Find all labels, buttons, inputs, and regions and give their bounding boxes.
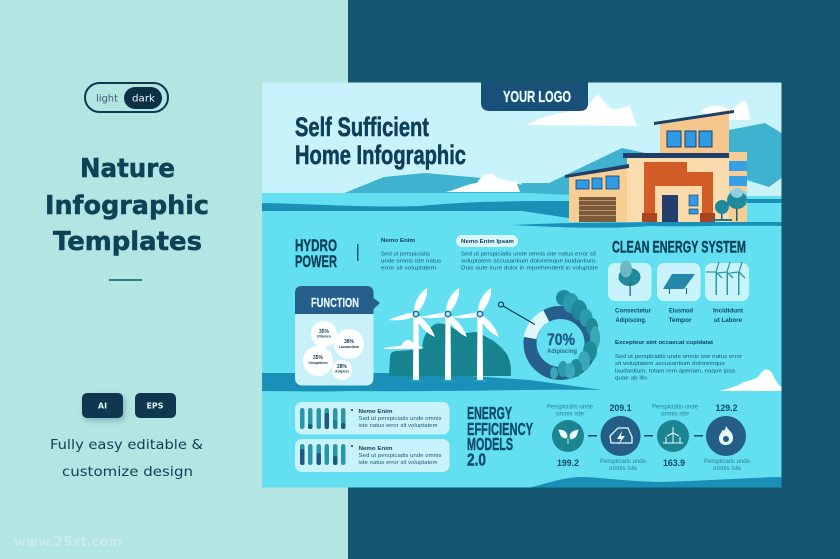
clouds bbox=[445, 94, 750, 192]
timeline labels: omnis iste bbox=[556, 412, 585, 418]
icon captions: Adipiscing. bbox=[616, 317, 647, 324]
function panel: Laudantium bbox=[339, 345, 359, 349]
donut chart: 70% bbox=[498, 290, 600, 379]
timeline values: 129.2 bbox=[716, 403, 738, 414]
donut chart: 70%: 70% bbox=[547, 330, 575, 349]
pointer bbox=[498, 302, 535, 324]
bubbles bbox=[303, 321, 364, 380]
icon: turbines bbox=[705, 262, 749, 301]
text: nemo enim: Nemo Enim bbox=[381, 238, 415, 244]
card 2: Nemo Enim bbox=[358, 446, 392, 452]
timeline labels: omnis iste bbox=[661, 412, 690, 418]
function panel: 38% bbox=[344, 339, 355, 345]
timeline labels: omnis iste bbox=[609, 466, 638, 472]
tagline bbox=[50, 437, 203, 480]
text: nemo enim ipsam: Nemo Enim Ipsam bbox=[461, 239, 514, 245]
text: nemo enim: unde omnis iste natus bbox=[381, 258, 441, 264]
function panel: Ullamco bbox=[317, 334, 332, 338]
timeline values bbox=[557, 403, 738, 469]
toggle: light dark bbox=[85, 83, 168, 112]
text: excepteur bbox=[615, 340, 742, 382]
node: turbines bbox=[657, 420, 689, 452]
heading: hydro power: HYDRO bbox=[295, 236, 337, 255]
logo tab: YOUR LOGO bbox=[503, 89, 571, 106]
tagline: customize design bbox=[62, 464, 193, 480]
left panel: promo bbox=[14, 83, 209, 550]
water band: mid bbox=[262, 373, 602, 391]
text: nemo enim bbox=[381, 238, 441, 272]
main body bbox=[627, 158, 729, 222]
function panel: Adipisci bbox=[335, 370, 349, 374]
donut chart: 70%: Adipiscing bbox=[547, 348, 577, 355]
timeline labels: Perspiciatis unde bbox=[704, 459, 751, 465]
icon: tree bbox=[608, 260, 652, 301]
clean energy system section bbox=[608, 238, 782, 391]
heading: energy efficiency models: 2.0 bbox=[467, 450, 486, 470]
text: excepteur: Excepteur sint occaecat cupidatat bbox=[615, 340, 713, 346]
timeline labels bbox=[547, 404, 751, 472]
text: excepteur: Sed ut perspiciatis unde omnis iste natus error bbox=[615, 354, 742, 360]
side balcony bbox=[725, 152, 747, 222]
trees bbox=[550, 290, 600, 379]
title bbox=[295, 112, 466, 170]
timeline labels: Perspiciatis unde bbox=[652, 404, 699, 410]
tagline: Fully easy editable & bbox=[50, 437, 203, 453]
heading: Nature Infographic Templates: Templates bbox=[53, 227, 202, 257]
upper floor bbox=[660, 110, 729, 157]
function panel: Voluptatem bbox=[308, 361, 328, 365]
card 2 bbox=[295, 439, 450, 472]
heading: energy efficiency models bbox=[467, 403, 533, 470]
card 1: iste natus error sit voluptatem bbox=[358, 423, 438, 429]
card 1: Sed ut perspiciatis unde omnis bbox=[358, 416, 442, 422]
icon captions: Consectetur bbox=[615, 308, 652, 314]
title: Home Infographic bbox=[295, 140, 466, 170]
heading: energy efficiency models: ENERGY bbox=[467, 403, 512, 423]
orange facade bbox=[644, 162, 713, 214]
function panel: 28% bbox=[337, 364, 348, 370]
toggle: light dark: light bbox=[96, 94, 118, 104]
node: flame bbox=[706, 416, 746, 456]
function panel: 35% bbox=[313, 355, 324, 361]
function panel: FUNCTION bbox=[311, 296, 359, 310]
timeline labels: omnis iste bbox=[713, 466, 742, 472]
timeline labels: Perspiciatis unde bbox=[600, 459, 647, 465]
infographic card bbox=[262, 82, 782, 488]
card 1 bbox=[295, 402, 450, 434]
icon captions: ut Labore bbox=[714, 317, 742, 324]
toggle: light dark: dark bbox=[132, 94, 155, 104]
illustration: house bbox=[512, 110, 782, 228]
icon captions bbox=[615, 308, 744, 324]
node: solar house bbox=[600, 416, 640, 456]
ground bbox=[512, 222, 782, 228]
heading: Nature Infographic Templates: Infographic bbox=[45, 191, 209, 221]
text: nemo enim: error sit voluptatem bbox=[381, 266, 436, 272]
timeline labels: Perspiciatis unde bbox=[547, 404, 594, 410]
title: Self Sufficient bbox=[295, 112, 429, 142]
node: leaf bbox=[552, 420, 584, 452]
format badges: EPS bbox=[146, 402, 164, 410]
illustration: hill and wind turbines bbox=[384, 288, 511, 382]
heading: hydro power bbox=[295, 236, 337, 271]
hydro power section bbox=[295, 235, 598, 272]
text: nemo enim ipsam: voluptatem accusantium doloremque laudantium. bbox=[461, 258, 597, 264]
heading: CLEAN ENERGY SYSTEM bbox=[612, 238, 746, 256]
heading: energy efficiency models: MODELS bbox=[467, 434, 513, 454]
text: excepteur: quae ab illo bbox=[615, 376, 647, 382]
format badges: AI bbox=[98, 402, 107, 410]
heading: Nature Infographic Templates bbox=[45, 154, 209, 257]
timeline values: 209.1 bbox=[610, 403, 632, 414]
text: nemo enim ipsam bbox=[456, 235, 598, 272]
timeline values: 163.9 bbox=[663, 458, 685, 469]
text: nemo enim: Sed ut perspiciatis bbox=[381, 252, 430, 258]
water band bbox=[262, 201, 569, 218]
hills bbox=[342, 123, 782, 196]
icon captions: Eiusmod bbox=[669, 308, 693, 314]
bottom left: stat cards bbox=[295, 402, 450, 472]
bottom wave bbox=[530, 477, 782, 488]
icon: solar panel bbox=[657, 263, 700, 301]
function panel bbox=[295, 286, 380, 386]
logo tab bbox=[481, 82, 588, 111]
sky bbox=[262, 82, 782, 196]
watermark: www.25xt.com bbox=[14, 535, 122, 550]
text: excepteur: sit voluptatem accusantium doloremque bbox=[615, 361, 725, 367]
icon captions: Incididunt bbox=[713, 308, 744, 314]
heading: energy efficiency models: EFFICIENCY bbox=[467, 419, 533, 439]
garage wing bbox=[569, 166, 627, 222]
icon captions: Tempor bbox=[668, 317, 692, 324]
text: nemo enim ipsam: Duis aute irure dolor in reprehenderit in voluptate bbox=[461, 266, 598, 272]
function panel: 35% bbox=[319, 329, 330, 335]
format badges bbox=[82, 393, 176, 418]
timeline bbox=[547, 403, 751, 472]
card 2: Sed ut perspiciatis unde omnis bbox=[358, 453, 442, 459]
trees bbox=[715, 188, 747, 221]
heading: Nature Infographic Templates: Nature bbox=[80, 154, 175, 184]
cloud bbox=[720, 369, 782, 391]
text: nemo enim ipsam: Sed ut perspiciatis unde omnis iste natus error sit bbox=[461, 252, 596, 258]
text: excepteur: laudantium, totam rem aperiam, eaque ipsa bbox=[615, 368, 736, 374]
card 1: Nemo Enim bbox=[358, 409, 392, 415]
timeline values: 199.2 bbox=[557, 458, 579, 469]
heading: hydro power: POWER bbox=[295, 252, 337, 271]
card 2: iste natus error sit voluptatem bbox=[358, 460, 438, 466]
